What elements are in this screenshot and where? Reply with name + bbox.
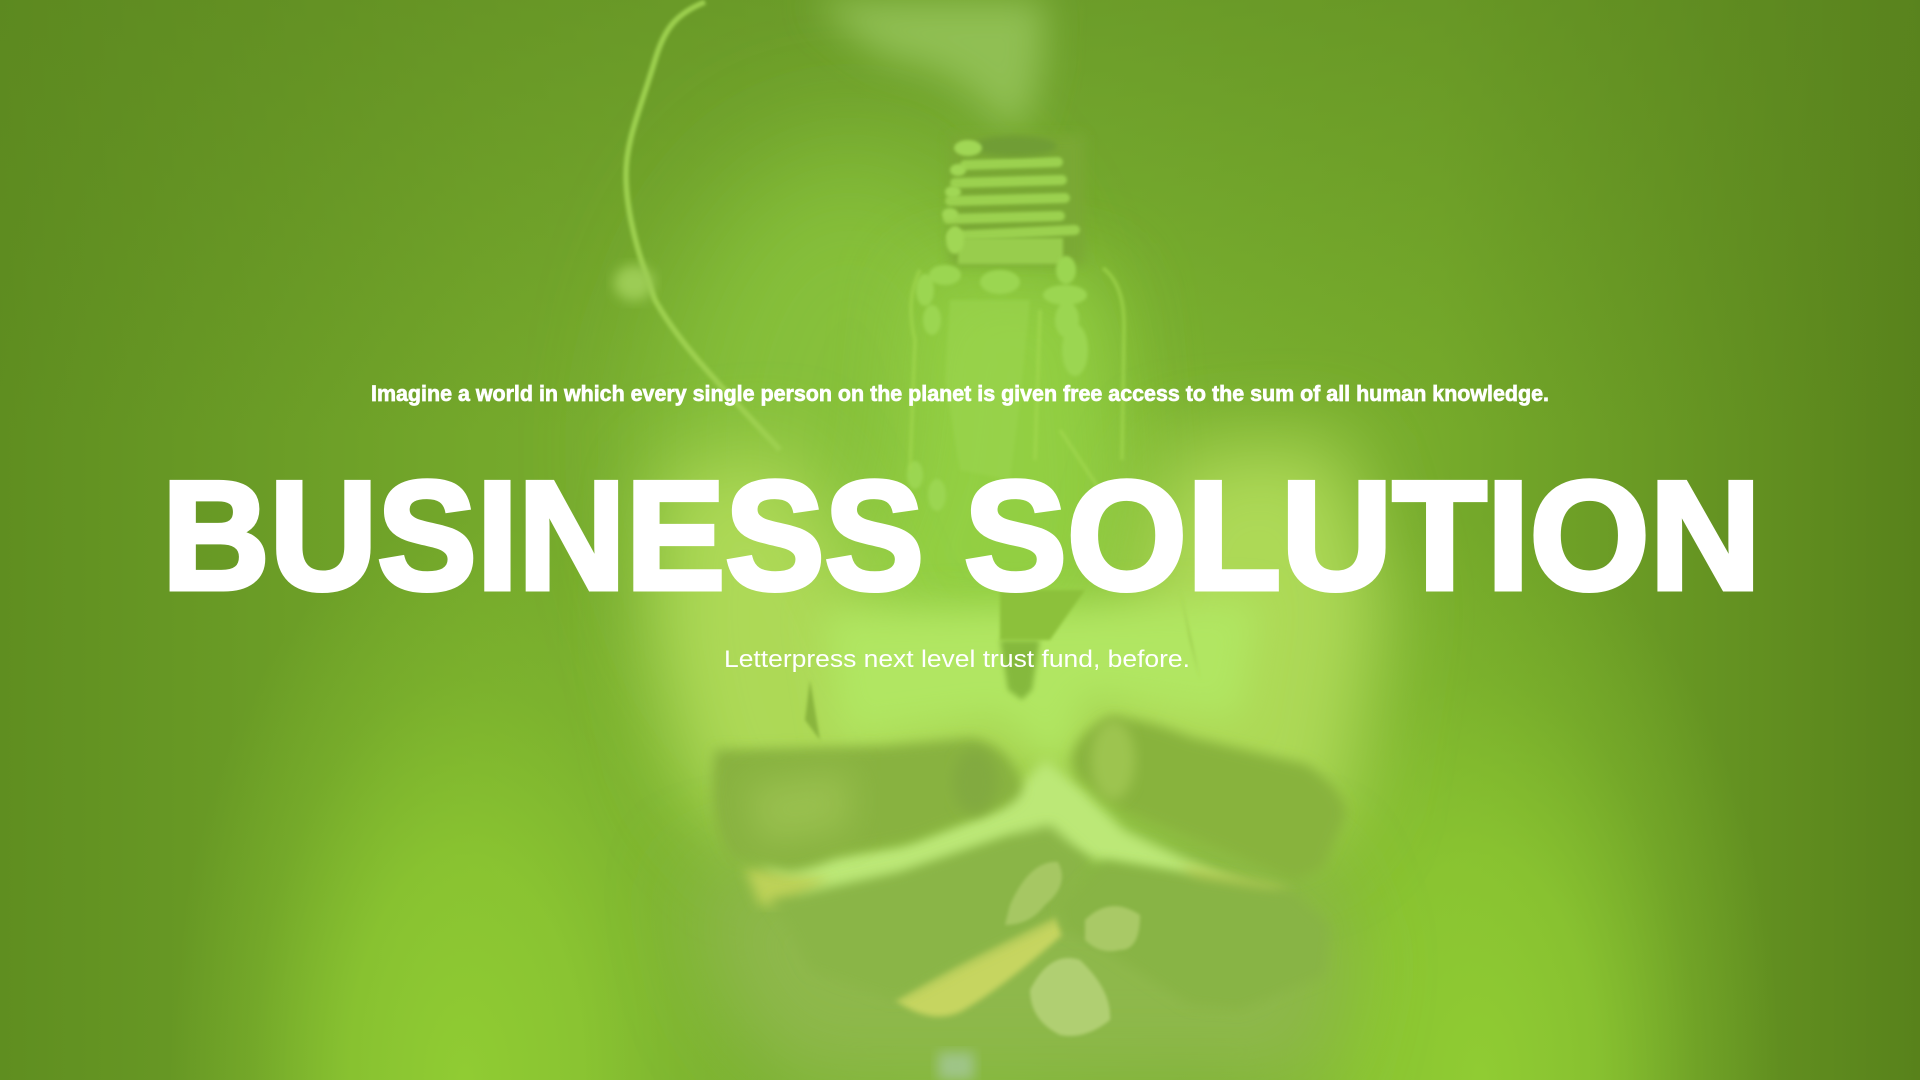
central column glow — [660, 150, 1040, 750]
subtitle: Letterpress next level trust fund, before. — [724, 646, 1190, 673]
intro sentence: Imagine a world in which every single person on the planet is given free access to the sum of all human knowledge. — [371, 381, 1549, 406]
finger nails — [1005, 862, 1062, 925]
lower hand mass — [690, 860, 1350, 1080]
left thumb — [712, 738, 1022, 871]
title: BUSINESS — [162, 449, 924, 622]
title — [162, 449, 1761, 622]
title: SOLUTION — [964, 449, 1761, 622]
palm light region — [650, 440, 1385, 870]
light band at top — [815, 0, 1045, 130]
dark glass streaks — [1000, 640, 1040, 700]
wire — [626, 2, 780, 450]
bulb glass glow — [830, 270, 1130, 640]
thumb nails — [1091, 720, 1135, 800]
yellow highlight — [895, 915, 1062, 1016]
right thumb — [1071, 716, 1346, 881]
lower right finger — [1060, 862, 1330, 1010]
lower left finger — [770, 825, 1090, 1000]
bulb glass outline — [910, 268, 1124, 490]
palm centre glow — [760, 760, 1250, 905]
bulb neck and drops — [907, 256, 1088, 511]
bulb socket — [942, 135, 1085, 265]
bottom stem glow — [938, 1052, 974, 1080]
